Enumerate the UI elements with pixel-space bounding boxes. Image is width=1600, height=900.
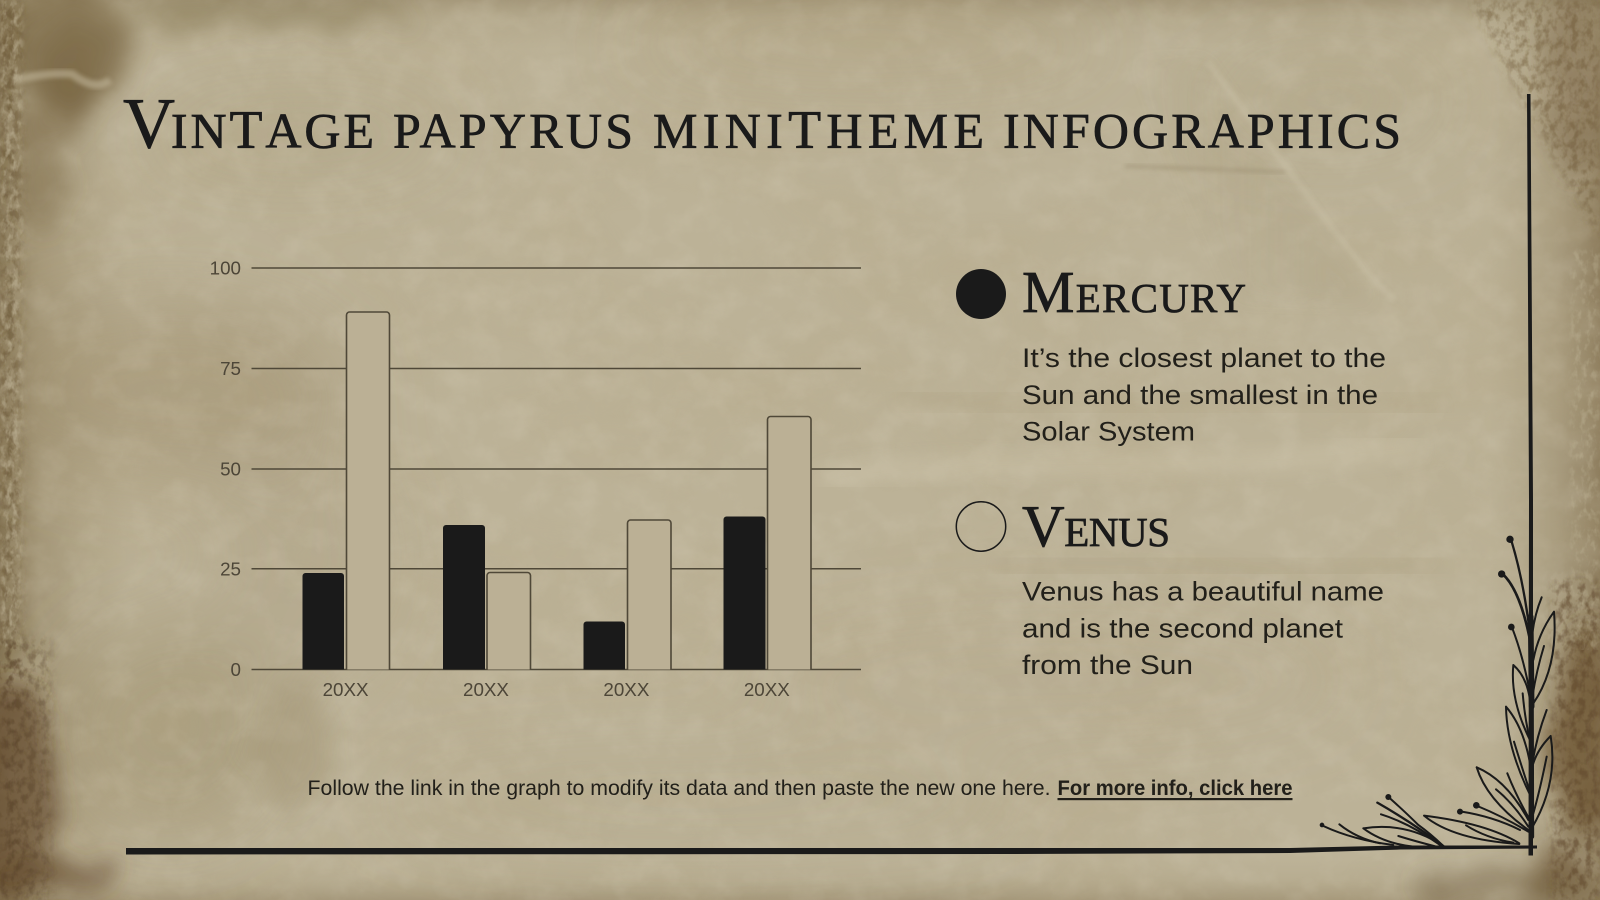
text: Mercury description: Solar System — [1022, 416, 1195, 446]
text: Mercury description: It’s the closest planet to the — [1022, 343, 1386, 373]
y axis labels: 100 — [210, 258, 241, 278]
y axis labels — [210, 258, 241, 680]
text: Venus description — [1022, 576, 1384, 680]
heading: Venus: Venus — [1022, 493, 1170, 559]
text: Mercury description — [1022, 343, 1386, 446]
text: Venus description: and is the second planet — [1022, 614, 1344, 644]
x axis labels: 20XX — [744, 679, 790, 700]
bars: light series — [346, 312, 811, 670]
title: miniTheme — [653, 84, 984, 164]
x axis labels — [323, 679, 790, 700]
title: Vintage — [123, 78, 374, 164]
title — [123, 78, 1401, 164]
y axis labels: 25 — [220, 558, 241, 580]
footer note: For more info, click here — [1058, 777, 1292, 800]
heading: Mercury: Mercury — [1022, 259, 1246, 325]
title: papyrus — [393, 84, 633, 164]
bars: dark series — [302, 516, 766, 670]
x axis labels: 20XX — [603, 679, 650, 700]
text: Venus description: from the Sun — [1022, 650, 1193, 680]
text: Venus description: Venus has a beautiful name — [1022, 576, 1384, 606]
paper creases and scratches — [14, 55, 1440, 572]
bar chart — [210, 258, 861, 700]
legend: Mercury — [956, 259, 1386, 446]
text: Mercury description: Sun and the smallest in the — [1022, 380, 1378, 410]
icon: outlined circle — [956, 502, 1006, 551]
frame: right rule — [1527, 94, 1533, 856]
y axis labels: 0 — [231, 659, 241, 680]
y axis labels: 75 — [220, 358, 241, 379]
y axis labels: 50 — [220, 458, 241, 480]
legend: Venus — [956, 493, 1384, 680]
x axis labels: 20XX — [323, 679, 369, 700]
chart grid lines — [252, 268, 861, 670]
frame: bottom rule — [126, 846, 1537, 854]
icon: filled circle — [956, 269, 1006, 319]
icon: botanical corner ornament — [1320, 536, 1555, 847]
footer note: Follow the link in the graph to modify its data and then paste the new one here. — [308, 777, 1050, 800]
title: infographics — [1003, 84, 1401, 164]
x axis labels: 20XX — [463, 679, 509, 700]
